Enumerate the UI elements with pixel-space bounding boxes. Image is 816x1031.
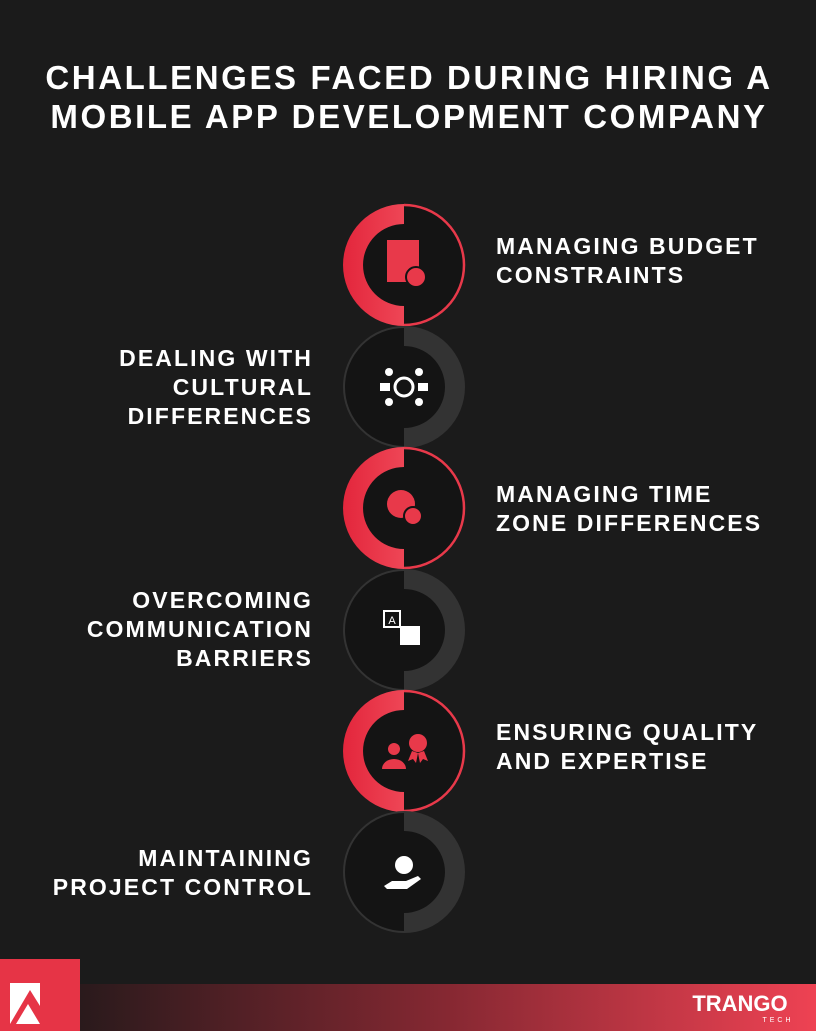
circle 4 dark — [344, 569, 465, 691]
circle 1 red — [343, 204, 464, 326]
label 3 — [496, 481, 762, 536]
footer bar — [80, 984, 816, 1031]
label 4: BARRIERS — [176, 645, 313, 671]
label 3: MANAGING TIME — [496, 481, 712, 507]
label 1: MANAGING BUDGET — [496, 233, 759, 259]
brand logo: TECH — [762, 1017, 794, 1024]
label 2: DIFFERENCES — [128, 403, 313, 429]
icon: project control — [384, 856, 421, 889]
icon: budget document — [387, 240, 426, 287]
label 2 — [119, 345, 313, 429]
label 2: CULTURAL — [173, 374, 313, 400]
brand logo: TRANGO — [692, 991, 788, 1016]
circle 6 dark — [344, 811, 465, 933]
label 4 — [87, 587, 313, 671]
circle 3 red — [343, 447, 464, 569]
label 6: PROJECT CONTROL — [53, 874, 313, 900]
label 3: ZONE DIFFERENCES — [496, 510, 762, 536]
title: CHALLENGES FACED DURING HIRING A — [45, 59, 773, 96]
label 1: CONSTRAINTS — [496, 262, 685, 288]
label 2: DEALING WITH — [119, 345, 313, 371]
icon: translation: A — [388, 615, 396, 627]
label 5 — [496, 719, 758, 774]
icon: quality expert — [382, 734, 428, 769]
circle 5 red — [343, 690, 464, 812]
icon: time zone globe — [387, 490, 422, 525]
logo mark — [0, 959, 80, 1031]
icon: cultural globe — [380, 368, 428, 406]
label 5: AND EXPERTISE — [496, 748, 709, 774]
label 1 — [496, 233, 759, 288]
label 5: ENSURING QUALITY — [496, 719, 758, 745]
label 6: MAINTAINING — [138, 845, 313, 871]
label 4: OVERCOMING — [132, 587, 313, 613]
circle 2 dark — [344, 326, 465, 448]
label 6 — [53, 845, 313, 900]
label 4: COMMUNICATION — [87, 616, 313, 642]
title: MOBILE APP DEVELOPMENT COMPANY — [50, 98, 768, 135]
title — [45, 59, 773, 135]
